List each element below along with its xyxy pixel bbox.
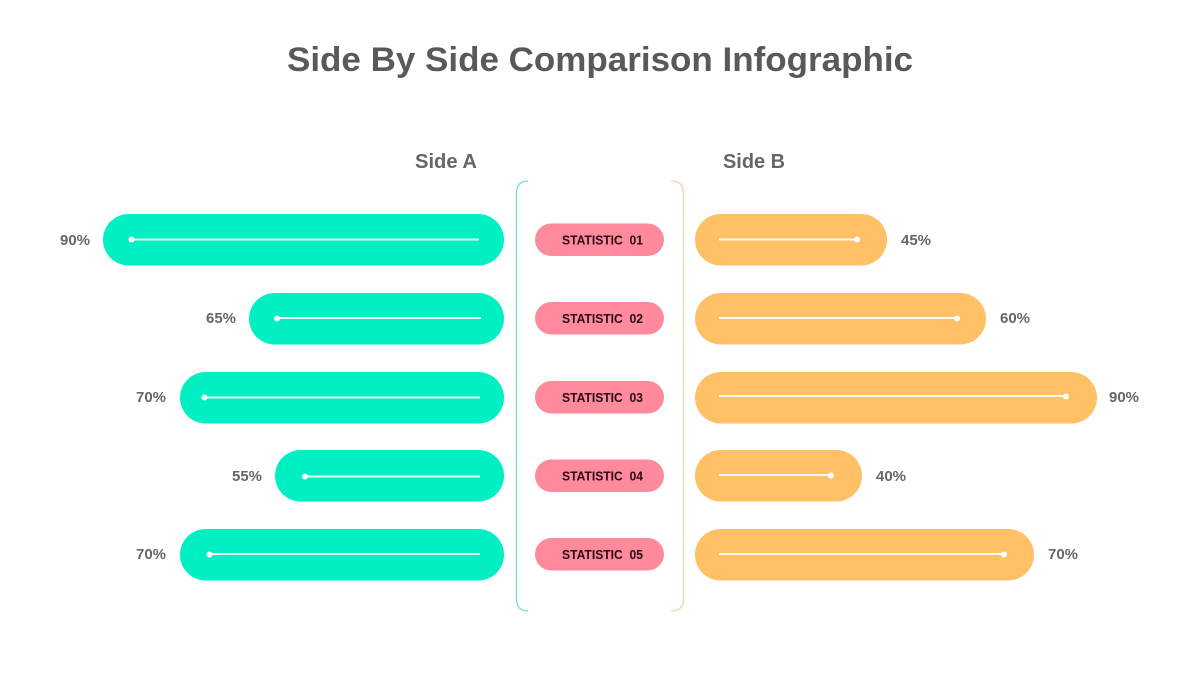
side A bar 70% — [180, 372, 504, 424]
side B bar 60% — [695, 293, 986, 344]
side B value: 90% — [1109, 389, 1139, 406]
side A value: 65% — [206, 310, 236, 327]
row 3 — [136, 372, 1139, 424]
side B value: 60% — [1000, 310, 1030, 327]
side A value: 70% — [136, 389, 166, 406]
side B bar 70% — [695, 529, 1034, 580]
side B value: 45% — [901, 232, 931, 249]
right bracket — [671, 181, 684, 611]
side A bar 55% — [275, 450, 504, 502]
statistic pill 01 — [535, 224, 664, 256]
title: Side By Side Comparison Infographic — [287, 41, 913, 79]
statistic pill 04: STATISTIC 04 — [562, 468, 644, 484]
side A bar 70% — [180, 529, 504, 580]
row 5 — [136, 529, 1078, 580]
side B value: 70% — [1048, 546, 1078, 563]
heading: Side A: Side A — [415, 151, 477, 173]
statistic pill 05 — [535, 538, 664, 570]
statistic pill 02 — [535, 302, 664, 334]
row 4 — [232, 450, 906, 502]
side B bar 90% — [695, 372, 1097, 424]
statistic pill 02: STATISTIC 02 — [562, 311, 643, 326]
side A bar 90% — [103, 214, 504, 266]
side B value: 40% — [876, 468, 906, 485]
row 2 — [206, 293, 1030, 344]
side B bar 45% — [695, 214, 887, 266]
heading: Side B: Side B — [723, 151, 785, 173]
statistic pill 03: STATISTIC 03 — [562, 390, 643, 405]
side B bar 40% — [695, 450, 862, 502]
side A value: 55% — [232, 468, 262, 485]
statistic pill 03 — [535, 381, 664, 414]
side A value: 90% — [60, 232, 90, 249]
row 1 — [60, 214, 931, 266]
side A bar 65% — [249, 293, 504, 344]
statistic pill 04 — [535, 460, 664, 492]
statistic pill 05: STATISTIC 05 — [562, 547, 643, 562]
side A value: 70% — [136, 546, 166, 563]
statistic pill 01: STATISTIC 01 — [562, 232, 643, 248]
left bracket — [516, 181, 528, 611]
